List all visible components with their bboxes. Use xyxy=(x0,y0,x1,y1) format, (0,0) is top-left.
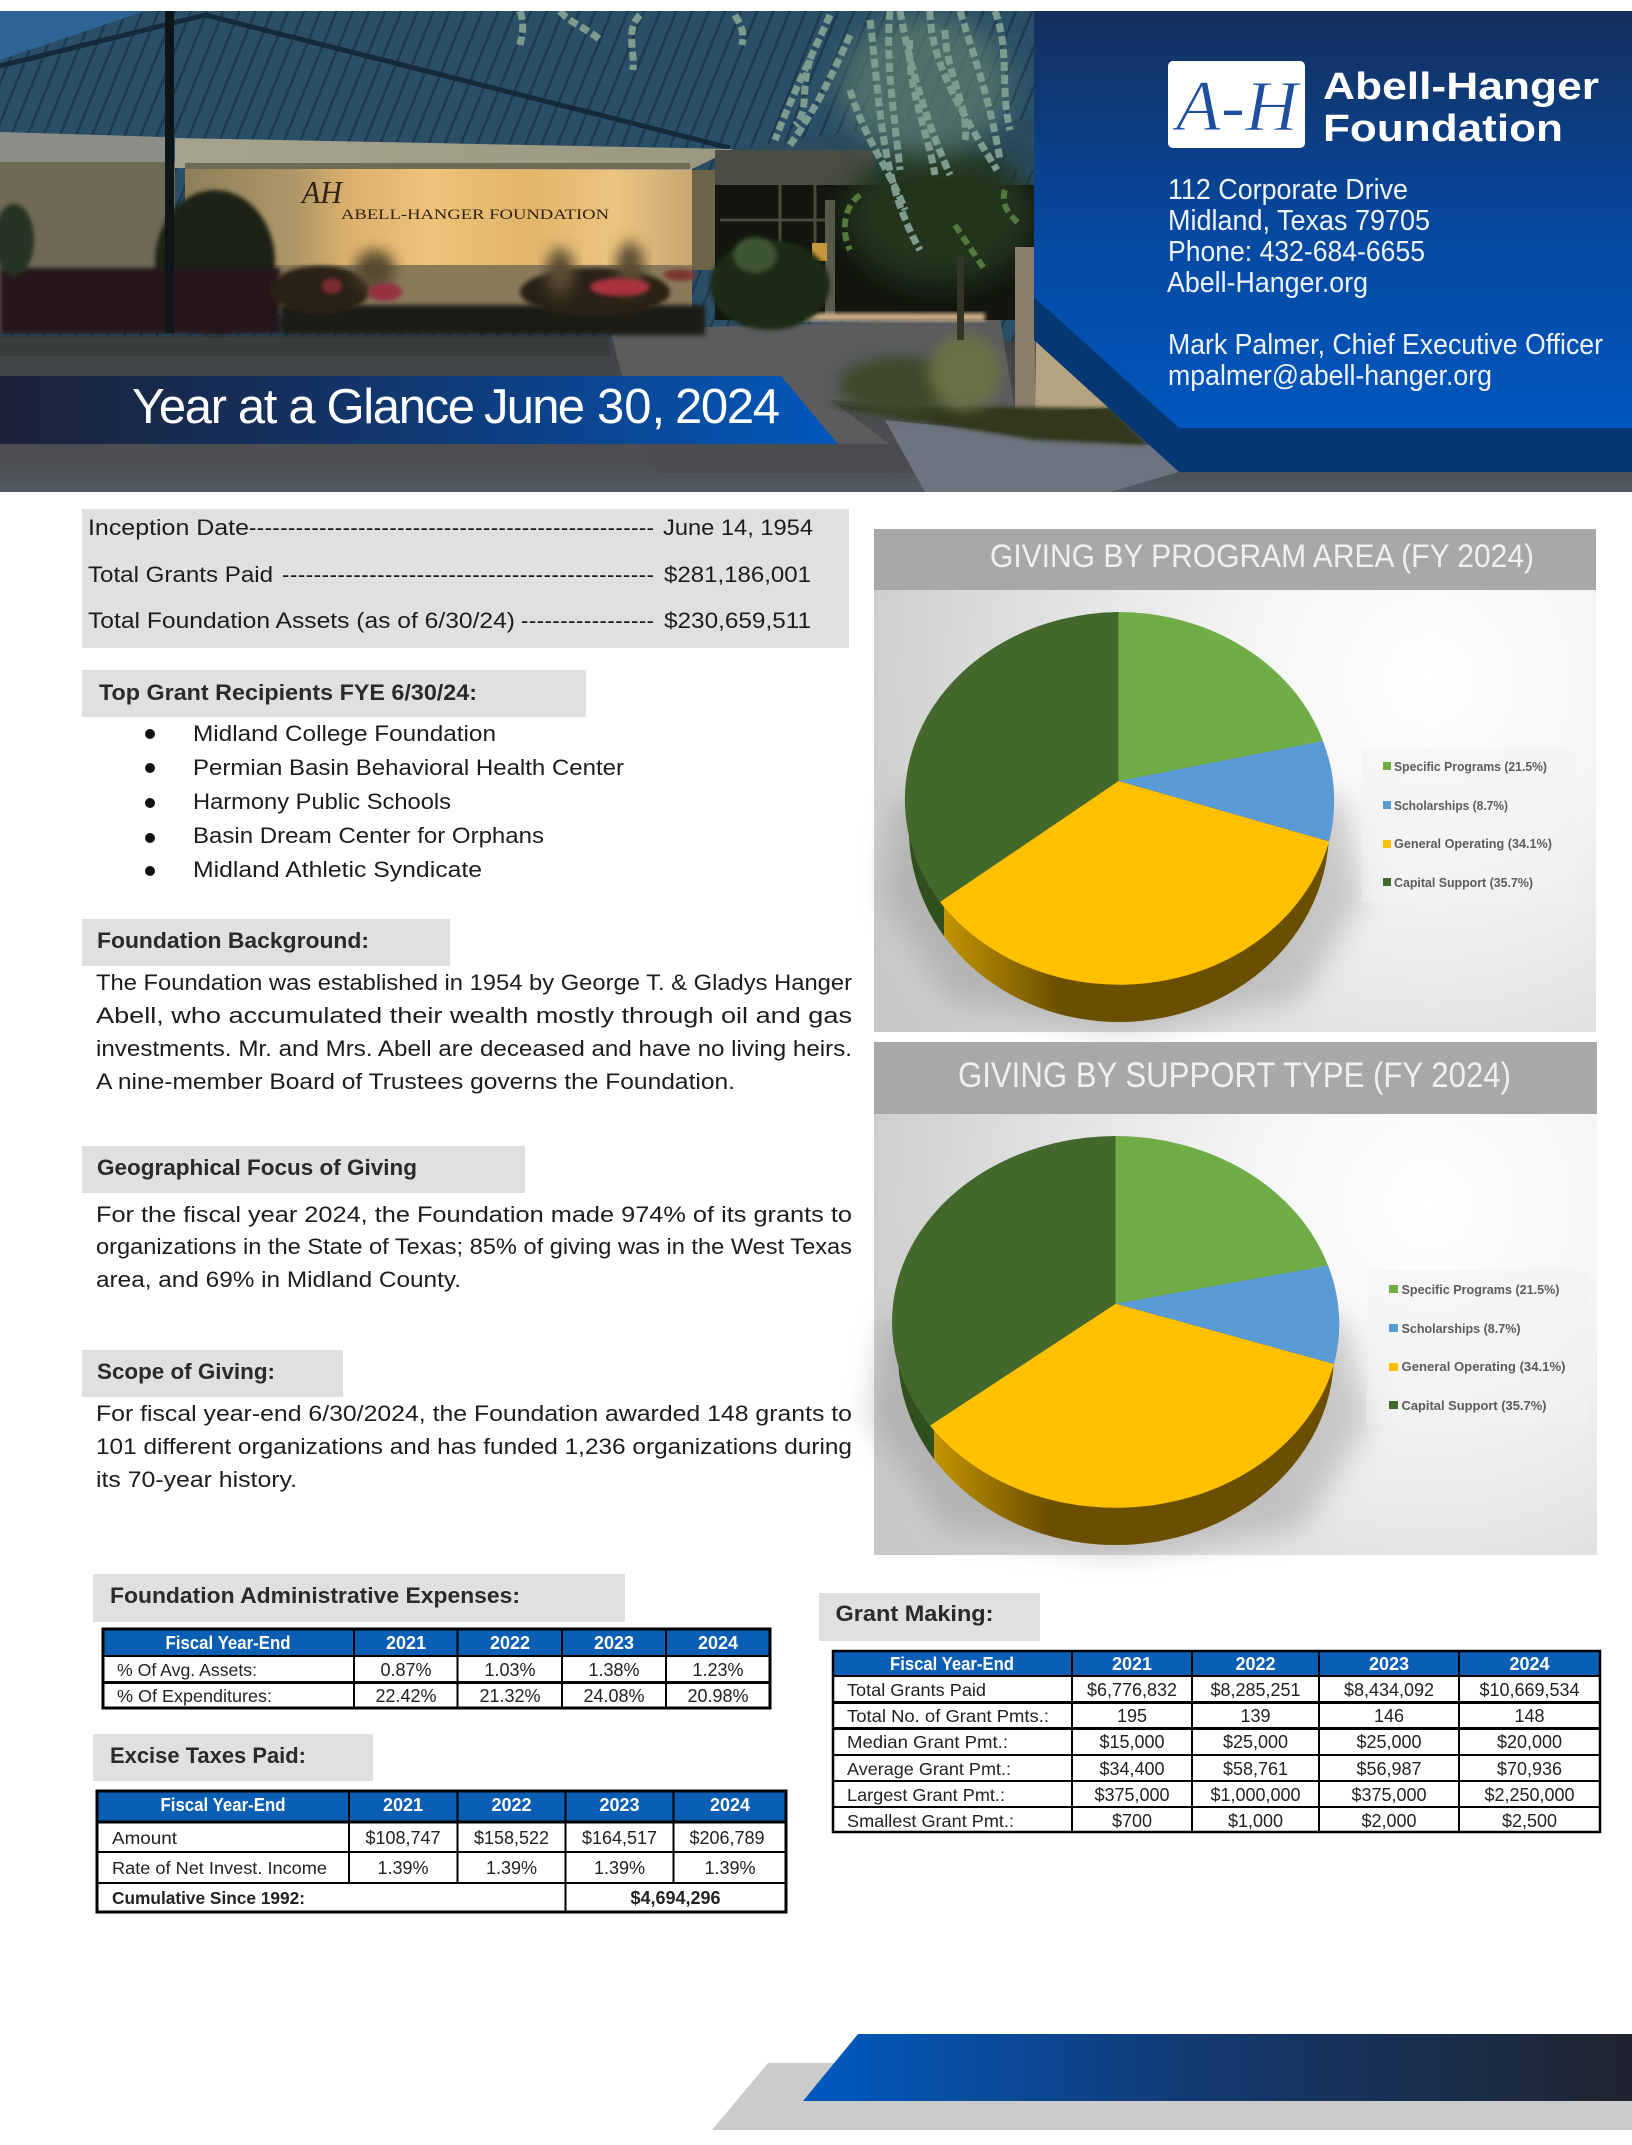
background paragraph: Abell, who accumulated their wealth mostly through oil and gas xyxy=(96,1003,852,1028)
geographic paragraph: For the fiscal year 2024, the Foundation made 974% of its grants to xyxy=(96,1202,852,1227)
heading: foundation administrative expenses xyxy=(93,1574,625,1622)
wall sign: ABELL-HANGER FOUNDATION xyxy=(341,207,609,223)
table: grant making: $70,936 xyxy=(1497,1759,1562,1779)
address block: Midland, Texas 79705 xyxy=(1168,205,1430,237)
table: grant making: $10,669,534 xyxy=(1479,1680,1580,1700)
table: excise taxes: 2021 xyxy=(383,1795,423,1815)
table: excise taxes: $164,517 xyxy=(582,1828,657,1848)
table: grant making: Largest Grant Pmt.: xyxy=(847,1785,1005,1805)
table: grant making: $2,000 xyxy=(1361,1811,1417,1831)
landscaping grasses xyxy=(825,255,1146,445)
geographic paragraph xyxy=(96,1202,852,1292)
address block: mpalmer@abell-hanger.org xyxy=(1168,360,1492,392)
table: grant making: Smallest Grant Pmt.: xyxy=(847,1811,1014,1831)
chart panel: giving by support type: GIVING BY SUPPORT TYPE (FY 2024) xyxy=(958,1056,1511,1095)
key facts panel: June 14, 1954 xyxy=(663,515,813,540)
willow tree xyxy=(520,11,1035,285)
table: grant making: $25,000 xyxy=(1223,1732,1288,1752)
chart panel: giving by program area xyxy=(874,529,1596,1032)
wall sign: AH xyxy=(300,174,344,210)
table: grant making: $8,434,092 xyxy=(1344,1680,1434,1700)
legend: program area xyxy=(1362,748,1574,902)
legend: support type xyxy=(1367,1270,1589,1424)
bullet list: Midland Athletic Syndicate xyxy=(193,857,482,882)
table: grant making: 2023 xyxy=(1369,1654,1409,1674)
legend: support type: Scholarships (8.7%) xyxy=(1402,1321,1520,1336)
table: excise taxes: $108,747 xyxy=(365,1828,441,1848)
title: 30, xyxy=(597,380,665,434)
contact panel xyxy=(1034,11,1632,472)
table: administrative expenses: 24.08% xyxy=(583,1686,645,1706)
bullet list xyxy=(145,721,624,882)
concrete post and paving xyxy=(1015,247,1112,412)
light pole xyxy=(165,11,174,333)
table: grant making: $58,761 xyxy=(1223,1759,1288,1779)
pie chart: support type xyxy=(870,1136,1370,1555)
table: grant making: Average Grant Pmt.: xyxy=(847,1759,1011,1779)
table: administrative expenses: Fiscal Year-End xyxy=(166,1633,290,1653)
table: excise taxes: 1.39% xyxy=(594,1858,645,1878)
table: grant making: $375,000 xyxy=(1094,1785,1170,1805)
legend: program area: Capital Support (35.7%) xyxy=(1394,875,1533,890)
table: grant making: Total No. of Grant Pmts.: xyxy=(847,1706,1049,1726)
bullet list: Basin Dream Center for Orphans xyxy=(193,823,544,848)
bullet list: Midland College Foundation xyxy=(193,721,496,746)
table: grant making: 2021 xyxy=(1112,1654,1152,1674)
table: administrative expenses xyxy=(103,1629,770,1708)
background paragraph: A nine-member Board of Trustees governs the Foundation. xyxy=(96,1069,735,1094)
table: grant making: $8,285,251 xyxy=(1210,1680,1301,1700)
section: top grant recipients: Top Grant Recipients FYE 6/30/24: xyxy=(99,680,477,705)
key facts panel: $281,186,001 xyxy=(664,562,811,587)
pie chart: program area xyxy=(885,612,1362,1032)
key facts panel xyxy=(82,509,849,648)
table: administrative expenses: 0.87% xyxy=(380,1660,432,1680)
table: grant making: $1,000,000 xyxy=(1210,1785,1301,1805)
legend: program area: Specific Programs (21.5%) xyxy=(1394,759,1547,774)
logo: Foundation xyxy=(1323,108,1563,150)
table: administrative expenses: % Of Avg. Assets: xyxy=(117,1660,257,1680)
table: administrative expenses: 1.38% xyxy=(588,1660,640,1680)
table: grant making: Total Grants Paid xyxy=(847,1680,986,1700)
table: grant making: 195 xyxy=(1117,1706,1147,1726)
table: grant making: 146 xyxy=(1374,1706,1404,1726)
geographic paragraph: organizations in the State of Texas; 85% of giving was in the West Texas xyxy=(96,1234,852,1259)
table: excise taxes: 1.39% xyxy=(486,1858,537,1878)
table: excise taxes xyxy=(97,1791,786,1912)
table: grant making: $6,776,832 xyxy=(1087,1680,1177,1700)
bullet list: Harmony Public Schools xyxy=(193,789,451,814)
table: excise taxes: 2023 xyxy=(599,1795,640,1815)
address block: Abell-Hanger.org xyxy=(1167,267,1368,299)
key facts panel: ----------------------------------------------- xyxy=(282,562,654,587)
title: 2024 xyxy=(675,380,780,434)
table: grant making: 2024 xyxy=(1509,1654,1550,1674)
table: grant making: 139 xyxy=(1240,1706,1271,1726)
table: excise taxes: Amount xyxy=(112,1828,177,1848)
table: excise taxes: 2022 xyxy=(491,1795,532,1815)
table: grant making: $25,000 xyxy=(1356,1732,1422,1752)
table: excise taxes: 1.39% xyxy=(377,1858,429,1878)
title xyxy=(132,380,780,434)
table: grant making: Median Grant Pmt.: xyxy=(847,1732,1008,1752)
table: administrative expenses: 1.03% xyxy=(484,1660,536,1680)
scope paragraph xyxy=(96,1401,852,1492)
table: excise taxes: $206,789 xyxy=(689,1828,765,1848)
legend: program area: General Operating (34.1%) xyxy=(1394,836,1552,851)
table: grant making: 148 xyxy=(1514,1706,1545,1726)
section: foundation background xyxy=(82,919,852,1094)
legend: support type: Capital Support (35.7%) xyxy=(1402,1398,1546,1413)
table: grant making: $20,000 xyxy=(1497,1732,1562,1752)
table: grant making: $1,000 xyxy=(1228,1811,1283,1831)
table: grant making: $2,250,000 xyxy=(1484,1785,1575,1805)
table: administrative expenses: 2024 xyxy=(698,1633,738,1653)
table: excise taxes: Cumulative Since 1992: xyxy=(112,1888,305,1908)
table: administrative expenses: 1.23% xyxy=(692,1660,744,1680)
chart panel: giving by program area: GIVING BY PROGRAM AREA (FY 2024) xyxy=(990,538,1534,574)
scope paragraph: For fiscal year-end 6/30/2024, the Foundation awarded 148 grants to xyxy=(96,1401,852,1426)
logo: Abell-Hanger xyxy=(1323,66,1599,108)
table: administrative expenses: % Of Expenditures: xyxy=(117,1686,272,1706)
footer band xyxy=(712,2034,1632,2130)
table: grant making: $15,000 xyxy=(1099,1732,1165,1752)
heading: excise taxes paid xyxy=(93,1734,373,1781)
table: excise taxes: 2024 xyxy=(710,1795,750,1815)
table: grant making: $375,000 xyxy=(1351,1785,1427,1805)
title: Year at a Glance xyxy=(132,380,475,434)
section: scope of giving: Scope of Giving: xyxy=(97,1359,275,1384)
title banner xyxy=(0,376,838,444)
table: grant making: $34,400 xyxy=(1099,1759,1165,1779)
table: administrative expenses: 21.32% xyxy=(479,1686,541,1706)
heading: foundation administrative expenses: Foundation Administrative Expenses: xyxy=(110,1583,520,1608)
table: administrative expenses: 22.42% xyxy=(375,1686,437,1706)
legend: support type: Specific Programs (21.5%) xyxy=(1402,1282,1560,1297)
background paragraph xyxy=(96,970,852,1094)
table: grant making: 2022 xyxy=(1235,1654,1276,1674)
section: scope of giving xyxy=(82,1350,852,1492)
scope paragraph: its 70-year history. xyxy=(96,1467,297,1492)
bullet list: Permian Basin Behavioral Health Center xyxy=(193,755,624,780)
table: administrative expenses: 2022 xyxy=(490,1633,530,1653)
table: excise taxes: $158,522 xyxy=(474,1828,549,1848)
table: grant making: $56,987 xyxy=(1356,1759,1422,1779)
scope paragraph: 101 different organizations and has funded 1,236 organizations during xyxy=(96,1434,852,1459)
legend: program area: Scholarships (8.7%) xyxy=(1394,798,1508,813)
table: grant making xyxy=(833,1651,1600,1832)
table: administrative expenses: 2023 xyxy=(594,1633,634,1653)
heading: grant making: Grant Making: xyxy=(836,1601,994,1626)
legend: support type: General Operating (34.1%) xyxy=(1402,1359,1566,1374)
logo: A-H xyxy=(1172,66,1302,146)
table: grant making: Fiscal Year-End xyxy=(890,1654,1014,1674)
key facts panel: $230,659,511 xyxy=(664,608,811,633)
key facts panel: Total Grants Paid xyxy=(88,562,273,587)
background paragraph: investments. Mr. and Mrs. Abell are deceased and have no living heirs. xyxy=(96,1036,852,1061)
table: excise taxes: 1.39% xyxy=(704,1858,756,1878)
key facts panel: ----------------- xyxy=(521,608,654,633)
logo xyxy=(1168,61,1599,150)
table: excise taxes: Fiscal Year-End xyxy=(160,1795,286,1815)
section: geographical focus: Geographical Focus of Giving xyxy=(97,1155,417,1180)
heading: excise taxes paid: Excise Taxes Paid: xyxy=(110,1743,306,1768)
heading: grant making xyxy=(819,1593,1040,1641)
section: geographical focus xyxy=(82,1146,852,1292)
table: grant making: $2,500 xyxy=(1502,1811,1557,1831)
table: grant making: $700 xyxy=(1112,1811,1152,1831)
chart panel: giving by support type xyxy=(870,1042,1597,1555)
geographic paragraph: area, and 69% in Midland County. xyxy=(96,1267,461,1292)
address block xyxy=(1167,174,1603,392)
address block: Mark Palmer, Chief Executive Officer xyxy=(1168,329,1603,361)
table: excise taxes: Rate of Net Invest. Income xyxy=(112,1858,327,1878)
hero photo: foundation building at dusk xyxy=(0,11,1632,492)
key facts panel: Total Foundation Assets (as of 6/30/24) xyxy=(88,608,515,633)
shrubs and flowers xyxy=(0,190,830,335)
table: administrative expenses: 20.98% xyxy=(687,1686,749,1706)
table: administrative expenses: 2021 xyxy=(386,1633,426,1653)
address block: Phone: 432-684-6655 xyxy=(1168,236,1425,268)
key facts panel: ---------------------------------------------------- xyxy=(249,515,654,540)
key facts panel: Inception Date xyxy=(88,515,249,540)
background paragraph: The Foundation was established in 1954 by George T. & Gladys Hanger xyxy=(96,970,852,995)
wall sign xyxy=(300,182,609,219)
section: foundation background: Foundation Background: xyxy=(97,928,369,953)
section: top grant recipients xyxy=(82,670,624,882)
title: June xyxy=(484,380,585,434)
address block: 112 Corporate Drive xyxy=(1168,174,1408,206)
table: excise taxes: $4,694,296 xyxy=(630,1888,721,1908)
